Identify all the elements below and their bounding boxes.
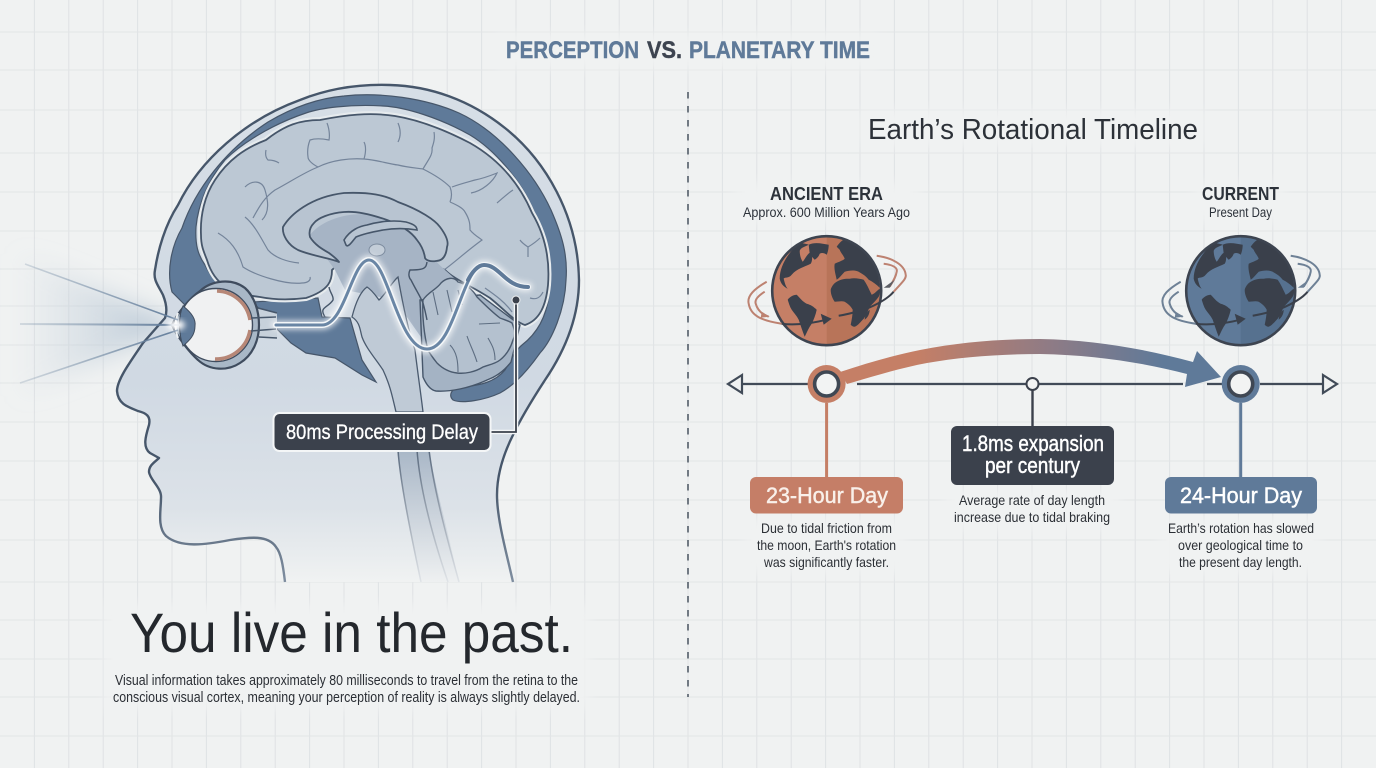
title: PLANETARY TIME [689, 37, 870, 64]
skull base [253, 298, 376, 382]
text: ancient description: was significantly faster. [763, 554, 889, 570]
body copy: Visual information takes approximately 80 milliseconds to travel from the retina to the [115, 673, 578, 689]
timeline axis [728, 375, 1337, 393]
brain folds lower [323, 262, 427, 320]
text: current description: the present day length. [1179, 554, 1302, 570]
cerebellum [423, 278, 514, 373]
card: 24-hour day [1165, 477, 1317, 514]
eye [172, 282, 277, 369]
light glow [15, 250, 180, 400]
callout: processing delay [274, 296, 520, 451]
title: PERCEPTION [506, 37, 639, 64]
title [506, 37, 870, 64]
title: VS. [647, 37, 682, 64]
brain folds [218, 123, 543, 312]
text: ancient description [757, 520, 896, 570]
body copy [113, 673, 580, 706]
card: 23-hour day [750, 477, 903, 514]
text: current description: Earth’s rotation has slowed [1168, 520, 1314, 536]
light rays [20, 264, 185, 383]
meninges band [170, 95, 566, 402]
label: current: CURRENT [1202, 184, 1279, 204]
corpus callosum [283, 193, 448, 262]
text: expansion description: increase due to tidal braking [954, 509, 1110, 525]
marker: ancient [808, 365, 846, 477]
pineal [369, 244, 385, 256]
headline: You live in the past. [130, 601, 573, 664]
text: ancient description: the moon, Earth's rotation [757, 537, 896, 553]
text: current description [1168, 520, 1314, 570]
text: expansion description [954, 492, 1110, 525]
text: expansion description: Average rate of day length [959, 492, 1105, 508]
label: ancient era [743, 184, 910, 220]
body copy: conscious visual cortex, meaning your perception of reality is always slightly delayed. [113, 690, 580, 706]
card: 23-hour day: 23-Hour Day [766, 483, 888, 508]
marker: midpoint [1026, 378, 1038, 427]
label: current: Present Day [1209, 205, 1272, 220]
divider [687, 92, 689, 697]
midbrain region [310, 214, 470, 340]
region under cerebellum [420, 295, 520, 391]
card: expansion rate: per century [985, 453, 1080, 478]
card: expansion rate: 1.8ms expansion [962, 431, 1104, 456]
head silhouette [117, 85, 579, 582]
card: 24-hour day: 24-Hour Day [1180, 483, 1302, 508]
optic nerve stub [255, 308, 277, 338]
brain [201, 114, 548, 325]
marker: current [1222, 365, 1260, 477]
label: current [1202, 184, 1279, 220]
brainstem [352, 277, 423, 412]
panel: head anatomy [15, 85, 579, 582]
callout: processing delay: 80ms Processing Delay [286, 421, 478, 444]
label: ancient era: ANCIENT ERA [770, 184, 883, 204]
label: ancient era: Approx. 600 Million Years Ago [743, 205, 910, 220]
icon: ancient globe [748, 236, 906, 345]
thalamus [344, 221, 417, 246]
neural signal path [276, 260, 528, 349]
card: expansion rate [951, 426, 1114, 485]
icon: current globe [1162, 236, 1320, 345]
text: ancient description: Due to tidal friction from [761, 520, 892, 536]
arrow: ancient to current [840, 339, 1221, 387]
spinal cord [398, 450, 459, 582]
text: current description: over geological time to [1178, 537, 1303, 553]
timeline heading: Earth’s Rotational Timeline [868, 114, 1198, 146]
